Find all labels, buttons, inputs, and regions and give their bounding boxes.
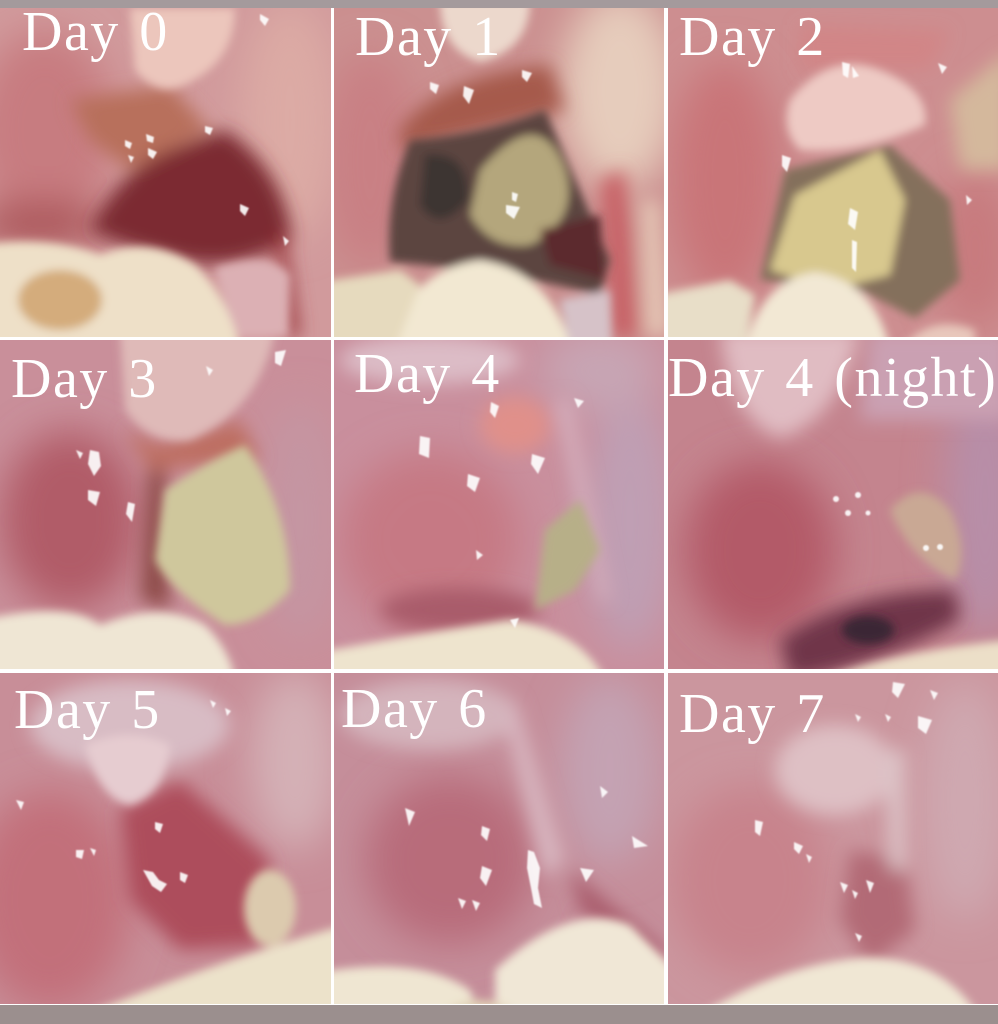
panel: Day 4 (night) bbox=[668, 330, 998, 680]
label: Day 4: Day 4 bbox=[354, 343, 501, 405]
panel: Day 4 bbox=[334, 340, 664, 669]
panel: Day 6 bbox=[334, 673, 664, 1004]
panel: Day 1 bbox=[334, 8, 664, 337]
label: Day 4 (night): Day 4 (night) bbox=[668, 347, 997, 409]
label: Day 6: Day 6 bbox=[341, 678, 488, 740]
panel: Day 2 bbox=[655, 6, 998, 350]
label: Day 2: Day 2 bbox=[679, 6, 826, 68]
panel: Day 3 bbox=[0, 330, 340, 680]
label: Day 0: Day 0 bbox=[22, 1, 169, 63]
label: Day 5: Day 5 bbox=[14, 679, 161, 741]
label: Day 3: Day 3 bbox=[11, 348, 158, 410]
label: Day 7: Day 7 bbox=[679, 683, 826, 745]
label: Day 1: Day 1 bbox=[355, 6, 502, 68]
panel: Day 7 bbox=[668, 673, 998, 1015]
panel: Day 0 bbox=[0, 0, 340, 350]
panel: Day 5 bbox=[0, 670, 345, 1015]
